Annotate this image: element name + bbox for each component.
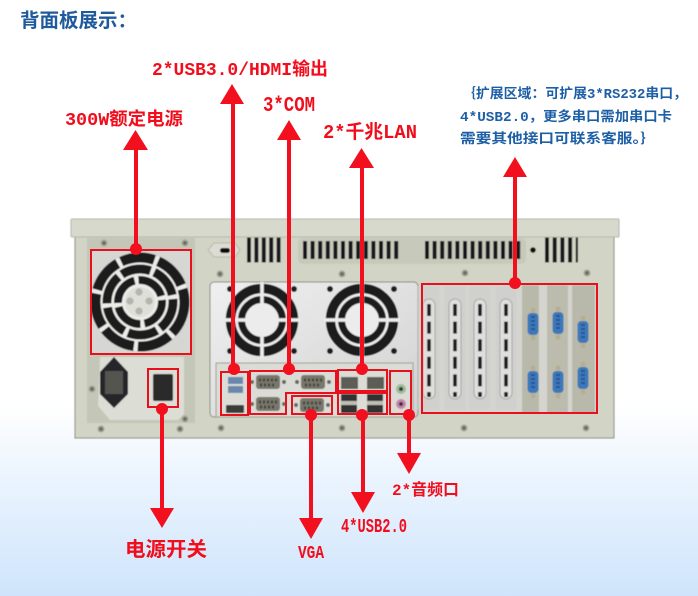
arrow: power supply — [123, 130, 148, 255]
motherboard plate — [210, 282, 418, 417]
top vents left — [247, 238, 282, 262]
arrow: USB2 — [351, 409, 375, 513]
IO shield — [216, 363, 413, 417]
top vents centre panel — [298, 238, 526, 264]
arrow: USB3 and HDMI — [220, 84, 244, 375]
system fan left — [224, 282, 300, 358]
serial expansion cards — [522, 285, 595, 413]
top vents right — [545, 238, 578, 262]
highlight boxes — [91, 250, 597, 415]
label: COM: 3*COM — [263, 95, 315, 118]
label: power switch: 电源开关 — [125, 538, 207, 563]
arrow: expansion area — [503, 157, 527, 289]
chassis screws — [88, 239, 591, 433]
LAN ports — [341, 377, 384, 389]
lock slot — [208, 243, 240, 257]
VGA port — [294, 398, 330, 412]
arrow: VGA — [299, 409, 323, 539]
USB 3.0 and HDMI ports — [226, 377, 244, 413]
USB 2.0 ports — [341, 394, 383, 413]
chassis top lid — [71, 219, 619, 237]
expansion slots — [418, 283, 598, 414]
rocker switch — [153, 374, 173, 401]
COM ports — [250, 375, 331, 411]
label: LAN: 2*千兆LAN — [323, 121, 417, 144]
power inlet panel — [98, 357, 184, 420]
blank slot covers — [418, 286, 517, 410]
label: power supply: 300W额定电源 — [65, 108, 183, 131]
power supply fan — [91, 250, 191, 354]
label: USB2: 4*USB2.0 — [341, 516, 407, 538]
chassis rear panel — [71, 219, 619, 438]
power supply plate — [87, 238, 195, 423]
label: USB3 and HDMI: 2*USB3.0/HDMI输出 — [152, 58, 328, 81]
text block: expansion area note: 4*USB2.0，更多串口需加串口卡 — [460, 108, 672, 126]
arrow: power switch — [150, 403, 174, 528]
AC power socket — [100, 357, 128, 408]
audio jacks — [396, 384, 406, 409]
arrow: COM — [277, 120, 301, 375]
title: 背面板展示： — [20, 10, 137, 33]
text block: expansion area note — [460, 85, 687, 148]
chassis body — [75, 234, 614, 438]
arrow: audio — [397, 409, 421, 474]
text block: expansion area note: ｛扩展区域：可扩展3*RS232串口， — [462, 85, 687, 103]
text block: expansion area note: 需要其他接口可联系客服。｝ — [460, 130, 656, 148]
system fan right — [324, 282, 400, 358]
label: VGA: VGA — [298, 544, 324, 564]
arrow: LAN — [349, 148, 374, 375]
label: audio: 2*音频口 — [392, 480, 459, 500]
